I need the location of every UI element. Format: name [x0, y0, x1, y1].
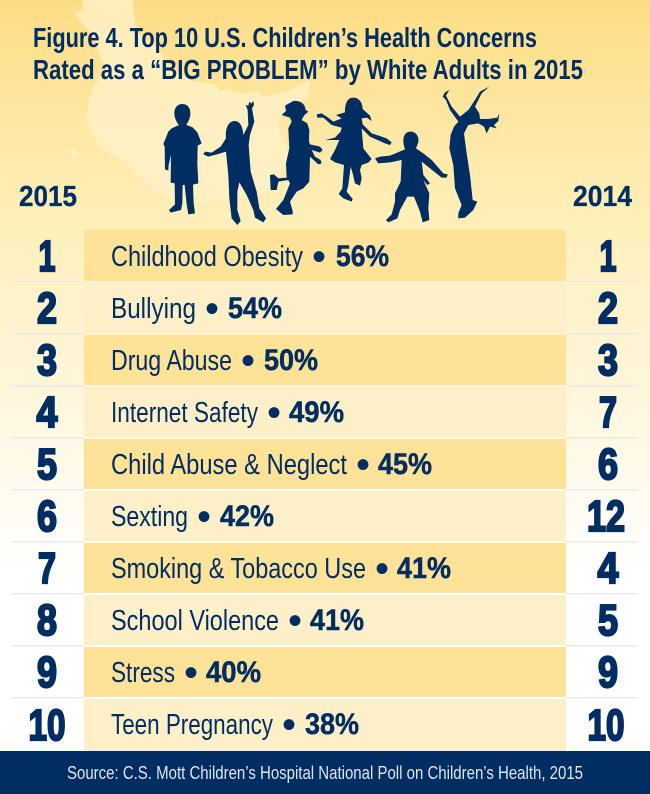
- row 4: 4: [36, 388, 58, 437]
- row 3: Drug Abuse: [111, 345, 232, 377]
- row 10: •: [282, 703, 296, 747]
- row 8: 5: [598, 596, 618, 645]
- row 9: 9: [37, 648, 57, 697]
- row 7: •: [375, 547, 389, 591]
- row 7: Smoking & Tobacco Use: [111, 553, 366, 585]
- row 9: [37, 648, 618, 697]
- row 10: Teen Pregnancy: [111, 709, 273, 741]
- row 8: [37, 596, 618, 645]
- row 10: 10: [28, 701, 66, 750]
- row 5: Child Abuse & Neglect: [111, 449, 347, 481]
- row 8: School Violence: [111, 605, 279, 637]
- row 4: •: [267, 391, 281, 435]
- row 5: 45%: [378, 448, 432, 481]
- row 5: [37, 440, 618, 489]
- row 4: [36, 388, 617, 437]
- row 2: •: [205, 287, 219, 331]
- children silhouettes: [163, 87, 499, 225]
- title: [33, 22, 583, 85]
- row 1: 1: [600, 232, 616, 281]
- row 8: 8: [37, 596, 57, 645]
- row 9: 9: [598, 648, 618, 697]
- source footer: [0, 751, 650, 794]
- row 8: 41%: [310, 604, 364, 637]
- row 3: [37, 336, 618, 385]
- row 1: 56%: [336, 240, 389, 273]
- row 10: 38%: [305, 708, 359, 741]
- row 6: 6: [37, 492, 57, 541]
- row 6: 12: [587, 492, 625, 541]
- row 2: Bullying: [111, 293, 196, 325]
- row 7: 41%: [397, 552, 451, 585]
- row 10: [28, 701, 624, 750]
- row 7: 4: [598, 544, 619, 593]
- row 6: •: [197, 495, 211, 539]
- row 2: 2: [598, 284, 618, 333]
- row 3: 50%: [264, 344, 318, 377]
- row 6: Sexting: [111, 501, 188, 533]
- row 9: •: [184, 651, 198, 695]
- row 1: [38, 232, 616, 281]
- row 5: 5: [37, 440, 57, 489]
- row 7: [38, 544, 619, 593]
- row 7: 7: [38, 544, 56, 593]
- row 4: 49%: [289, 396, 344, 429]
- row 1: 1: [38, 232, 56, 281]
- row 2: [37, 284, 618, 333]
- row 9: 40%: [206, 656, 261, 689]
- row 5: 6: [598, 440, 618, 489]
- row 2: 2: [37, 284, 57, 333]
- row 6: [37, 492, 625, 541]
- row 1: Childhood Obesity: [111, 241, 303, 273]
- row 8: •: [288, 599, 302, 643]
- row 3: 3: [37, 336, 57, 385]
- row 4: Internet Safety: [111, 397, 258, 429]
- map silhouette: [70, 0, 310, 203]
- row 3: •: [241, 339, 255, 383]
- row 3: 3: [598, 336, 618, 385]
- row 10: 10: [588, 701, 624, 750]
- row 2: 54%: [228, 292, 282, 325]
- row 4: 7: [599, 388, 617, 437]
- table bars: [12, 230, 638, 751]
- row 5: •: [356, 443, 370, 487]
- row 1: •: [312, 235, 326, 279]
- row 9: Stress: [111, 657, 175, 689]
- column heading: 2014: 2014: [573, 181, 632, 213]
- column heading: 2015: 2015: [19, 181, 77, 213]
- row 6: 42%: [220, 500, 274, 533]
